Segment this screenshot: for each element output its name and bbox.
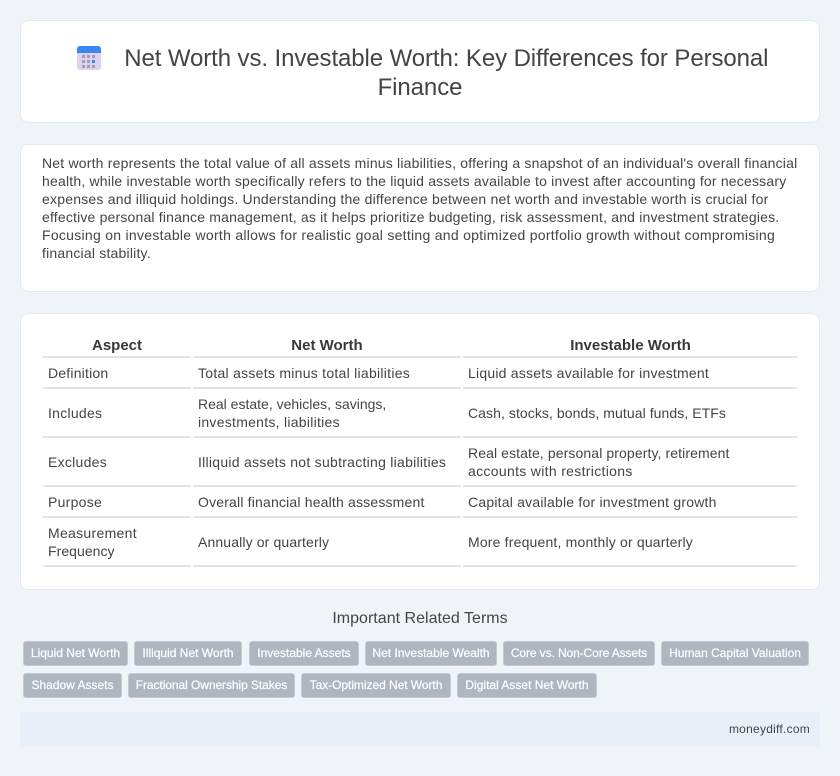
related term tags: Core vs. Non-Core Assets [511, 646, 647, 660]
row: measurement frequency: More frequent, monthly or quarterly [468, 534, 693, 550]
row: measurement frequency [48, 525, 693, 559]
related term tags: Tax-Optimized Net Worth [310, 678, 442, 692]
row: excludes: Excludes [48, 454, 107, 470]
footer source: moneydiff.com [729, 722, 810, 736]
row: excludes: accounts with restrictions [468, 463, 633, 479]
row: definition [48, 365, 709, 381]
comparison table card [20, 313, 820, 590]
table header: Net Worth [291, 337, 363, 354]
row: includes: investments, liabilities [198, 414, 340, 430]
row: includes: Real estate, vehicles, savings, [198, 396, 386, 412]
related term tags: Shadow Assets [31, 678, 114, 692]
related term tags: Liquid Net Worth [31, 646, 120, 660]
row: measurement frequency: Annually or quarterly [198, 534, 329, 550]
row: measurement frequency: Measurement [48, 525, 137, 541]
intro paragraph [42, 155, 797, 261]
intro paragraph: Focusing on investable worth allows for realistic goal setting and optimized portfolio growth without compromising [42, 227, 775, 243]
related term tags: Illiquid Net Worth [142, 646, 234, 660]
intro paragraph: financial stability. [42, 245, 151, 261]
related terms heading: Important Related Terms [332, 610, 508, 627]
row: includes: Includes [48, 405, 102, 421]
title: Finance [378, 74, 462, 101]
intro card [20, 144, 820, 292]
title: Net Worth vs. Investable Worth: Key Differences for Personal [124, 45, 768, 72]
row: definition: Total assets minus total liabilities [198, 365, 410, 381]
related term tags: Fractional Ownership Stakes [136, 678, 287, 692]
footer bar [20, 712, 820, 746]
row: excludes: Real estate, personal property, retirement [468, 445, 730, 461]
title [124, 45, 768, 101]
related term tags [23, 641, 809, 698]
header card [20, 20, 820, 123]
intro paragraph: expenses and illiquid holdings. Understanding the difference between net worth and investable worth is crucial for [42, 191, 768, 207]
row: definition: Liquid assets available for investment [468, 365, 709, 381]
table header: Investable Worth [570, 337, 691, 354]
row: purpose: Capital available for investment growth [468, 494, 717, 510]
related term tags: Net Investable Wealth [372, 646, 490, 660]
intro paragraph: Net worth represents the total value of all assets minus liabilities, offering a snapshot of an individual's overall financial [42, 155, 797, 171]
row: definition: Definition [48, 365, 108, 381]
row: includes [48, 396, 726, 430]
row: excludes: Illiquid assets not subtracting liabilities [198, 454, 446, 470]
row: includes: Cash, stocks, bonds, mutual funds, ETFs [468, 405, 726, 421]
intro paragraph: health, while investable worth specifically refers to the liquid assets available to invest after accounting for necessary [42, 173, 786, 189]
row: purpose [48, 494, 717, 510]
row: excludes [48, 445, 730, 479]
row: purpose: Purpose [48, 494, 102, 510]
intro paragraph: effective personal finance management, as it helps prioritize budgeting, risk assessment, and investment strategies. [42, 209, 779, 225]
related term tags: Human Capital Valuation [669, 646, 801, 660]
row: measurement frequency: Frequency [48, 543, 115, 559]
table header: Aspect [92, 337, 142, 354]
icon: calendar [77, 46, 101, 70]
related term tags: Digital Asset Net Worth [465, 678, 589, 692]
table header [92, 337, 691, 354]
row: purpose: Overall financial health assessment [198, 494, 425, 510]
related term tags: Investable Assets [257, 646, 351, 660]
